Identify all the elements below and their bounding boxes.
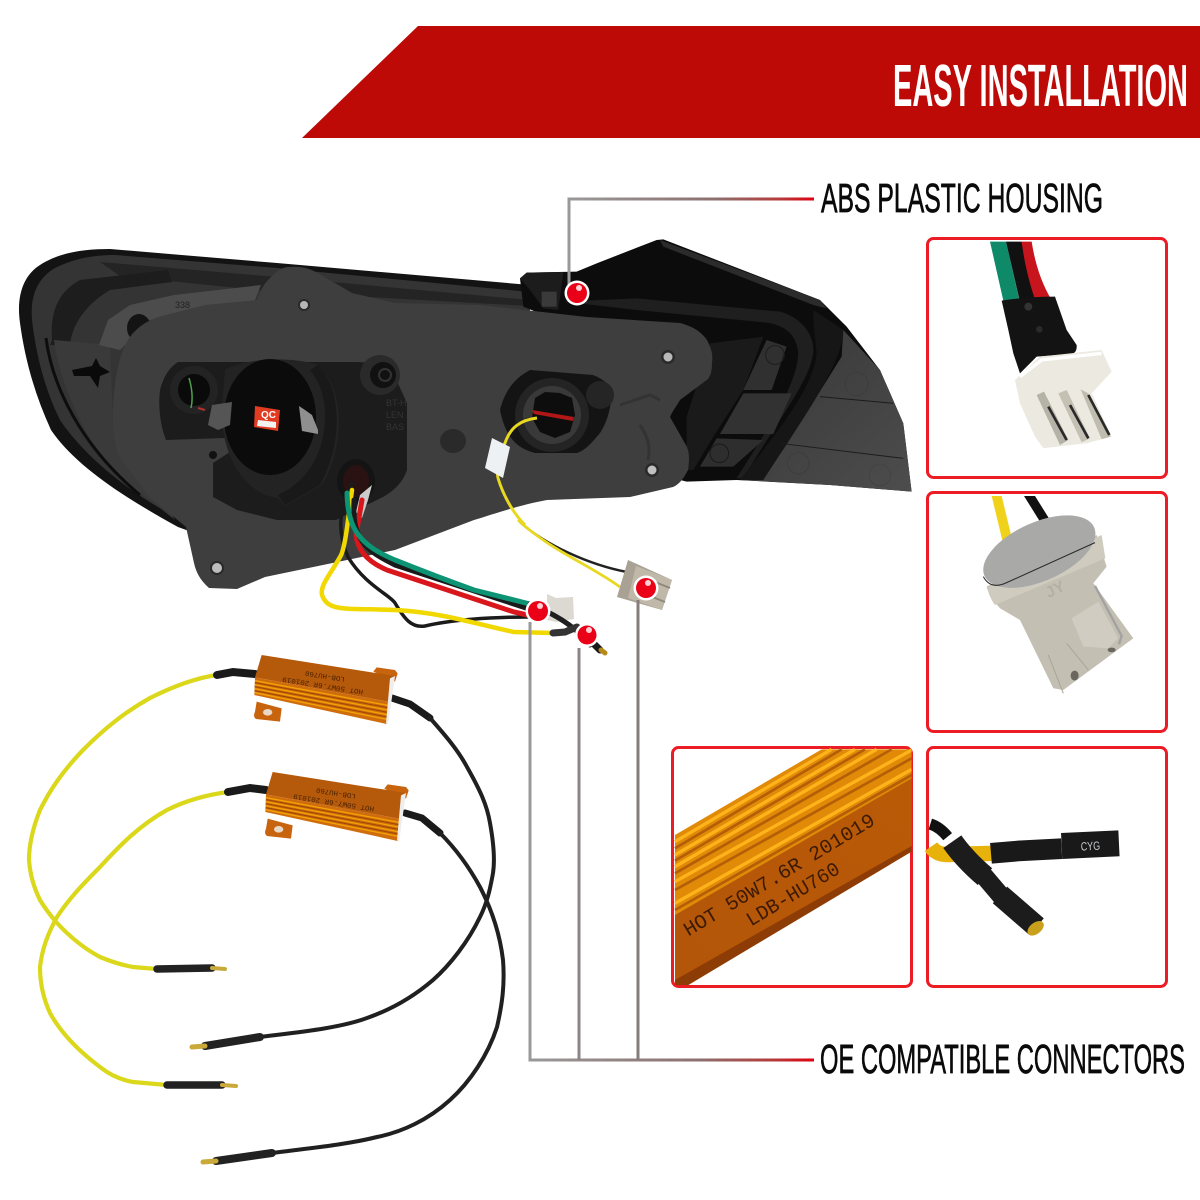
QC label — [254, 406, 280, 431]
resistor 1 — [254, 655, 398, 724]
bulb plug — [617, 560, 672, 610]
left socket recess: BT-H — [386, 398, 407, 408]
resistor 1: HOT 50W7.6R 201019 — [282, 674, 364, 695]
left housing shell: 338 — [175, 300, 190, 310]
resistor 2: LDB-HU760 — [316, 785, 356, 799]
detail panel: three-pin connector — [928, 238, 1166, 478]
right housing wing — [520, 239, 912, 492]
bottom callout leader lines — [530, 600, 814, 1060]
main wiring harness — [322, 483, 553, 633]
right socket — [500, 370, 614, 453]
hotspot marker: housing — [564, 280, 590, 306]
detail panel: bulb plug: JY — [1043, 578, 1068, 602]
resistor 2 — [265, 772, 409, 841]
detail panel: bulb plug — [928, 492, 1166, 732]
white connector — [547, 594, 574, 622]
gasket hole and screws — [209, 299, 675, 575]
left socket recess: LEN — [386, 410, 404, 420]
detail panel: resistor close-up: HOT 50W7.6R 201019 — [680, 810, 880, 943]
top callout leader line — [569, 199, 814, 285]
load resistor harness set — [29, 655, 504, 1162]
harness 1 wires — [29, 672, 494, 1047]
bulb harness label — [485, 438, 510, 478]
resistor 1: LDB-HU760 — [305, 668, 345, 682]
resistor 2: HOT 50W7.6R 201019 — [293, 791, 375, 812]
left socket recess — [159, 355, 407, 520]
tail light housing assembly — [19, 239, 912, 653]
hotspot marker: bulb plug — [634, 576, 658, 600]
wire exit grommet — [337, 459, 375, 518]
detail panel: spade connectors: CYG — [1080, 839, 1100, 854]
banner: easy installation — [302, 26, 1200, 138]
left housing shell — [19, 249, 530, 535]
left socket recess: BAS — [386, 422, 404, 432]
harness 2 wires — [40, 788, 504, 1162]
hotspot marker: three-pin connector — [526, 598, 550, 624]
foam gasket — [113, 267, 712, 589]
detail panel: resistor close-up: LDB-HU760 — [743, 859, 845, 933]
detail panel: spade connectors — [928, 748, 1166, 986]
detail panel: resistor close-up — [672, 748, 912, 986]
bulb harness — [497, 418, 627, 587]
hotspot marker: resistor connector — [575, 623, 599, 647]
QC label: QC — [261, 410, 276, 421]
connector wires — [530, 604, 605, 653]
